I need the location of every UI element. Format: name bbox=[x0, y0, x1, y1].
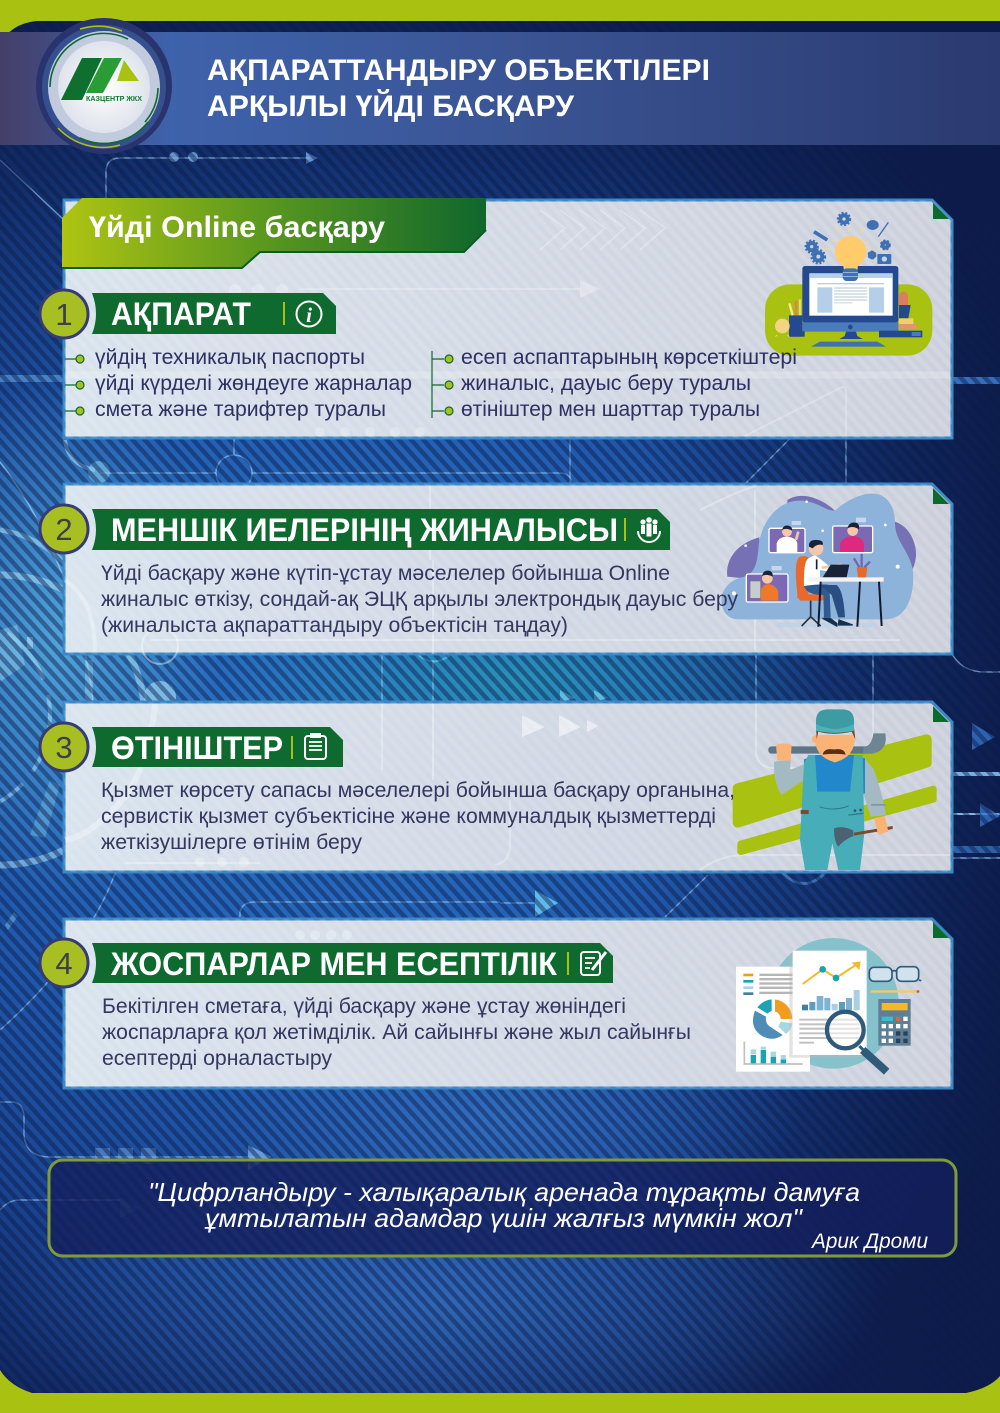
heading ribbon: ЖОСПАРЛАР МЕН ЕСЕПТІЛІК: ЖОСПАРЛАР МЕН ЕСЕПТІЛІК bbox=[110, 946, 557, 982]
heading ribbon: АҚПАРАТ: АҚПАРАТ bbox=[111, 296, 251, 332]
body text: Қызмет көрсету сапасы мәселелері бойынша басқару органына, bbox=[101, 779, 735, 802]
number badge 1 bbox=[40, 290, 88, 338]
body text: жеткізушілерге өтінім беру bbox=[101, 831, 362, 854]
quote box bbox=[49, 1160, 956, 1256]
title: АҚПАРАТТАНДЫРУ ОБЪЕКТІЛЕРІ bbox=[207, 54, 710, 87]
bullet list right: өтініштер мен шарттар туралы bbox=[461, 398, 760, 421]
illustration: plumber with wrench bbox=[738, 709, 933, 870]
bullet list right: есеп аспаптарының көрсеткіштері bbox=[461, 346, 797, 369]
body text: сервистік қызмет субъектісіне және коммуналдық қызметтерді bbox=[101, 805, 716, 828]
panel: 2 МЕНШІК ИЕЛЕРІНІҢ ЖИНАЛЫСЫ bbox=[40, 484, 952, 664]
number badge 1: 1 bbox=[55, 297, 73, 332]
body text: жиналыс өткізу, сондай-ақ ЭЦҚ арқылы электрондық дауыс беру bbox=[101, 588, 739, 611]
number badge 4 bbox=[40, 939, 88, 987]
bullet list left: үйді күрделі жөндеуге жарналар bbox=[95, 372, 412, 395]
illustration: computer with light bulb bbox=[765, 213, 932, 356]
body text bbox=[101, 779, 735, 854]
bullet list left: смета және тарифтер туралы bbox=[95, 398, 386, 421]
logo: КАЗЦЕНТР ЖКХ bbox=[86, 94, 142, 103]
number badge 4: 4 bbox=[55, 946, 73, 981]
heading ribbon: АҚПАРАТ: i bbox=[306, 303, 312, 327]
number badge 2 bbox=[40, 505, 88, 553]
panel: 1 АҚПАРАТ bbox=[40, 198, 952, 438]
section tab: Үйді Online басқару bbox=[62, 198, 486, 268]
heading ribbon: АҚПАРАТ bbox=[92, 293, 336, 334]
bullet list left: үйдің техникалық паспорты bbox=[95, 346, 365, 369]
title: АРҚЫЛЫ ҮЙДІ БАСҚАРУ bbox=[207, 89, 574, 123]
logo bbox=[36, 18, 172, 154]
body text: есептерді орналастыру bbox=[102, 1047, 333, 1070]
panel: 4 ЖОСПАРЛАР МЕН ЕСЕПТІЛІК bbox=[40, 919, 952, 1088]
body text: Бекітілген сметаға, үйді басқару және ұстау жөніндегі bbox=[102, 995, 626, 1018]
title bbox=[207, 54, 710, 123]
body text: (жиналыста ақпараттандыру объектісін таңдау) bbox=[101, 614, 568, 637]
heading ribbon: ӨТІНІШТЕР bbox=[92, 727, 343, 767]
bullet list right: жиналыс, дауыс беру туралы bbox=[461, 372, 751, 395]
header band bbox=[0, 32, 1000, 145]
quote text: ұмтылатын адамдар үшін жалғыз мүмкін жол" bbox=[204, 1203, 804, 1233]
number badge 3: 3 bbox=[55, 730, 73, 765]
illustration: reports and magnifier bbox=[736, 938, 921, 1072]
section tab: Үйді Online басқару: Үйді Online басқару bbox=[89, 211, 385, 244]
illustration: online meeting bbox=[721, 494, 916, 627]
number badge 3 bbox=[40, 723, 88, 771]
body text: Үйді басқару және күтіп-ұстау мәселелер бойынша Online bbox=[101, 562, 670, 585]
panel: 3 ӨТІНІШТЕР bbox=[40, 702, 952, 872]
number badge 2: 2 bbox=[55, 512, 73, 547]
body text: жоспарларға қол жетімділік. Ай сайынғы және жыл сайынғы bbox=[102, 1021, 691, 1044]
bullet list left bbox=[65, 346, 412, 421]
heading ribbon: ӨТІНІШТЕР: ӨТІНІШТЕР bbox=[111, 730, 283, 766]
body text bbox=[101, 562, 739, 637]
heading ribbon: МЕНШІК ИЕЛЕРІНІҢ ЖИНАЛЫСЫ: МЕНШІК ИЕЛЕРІНІҢ ЖИНАЛЫСЫ bbox=[111, 512, 618, 548]
body text bbox=[102, 995, 691, 1070]
bullet list right bbox=[432, 346, 797, 421]
quote text bbox=[148, 1177, 860, 1233]
quote author: Арик Дроми bbox=[810, 1230, 928, 1253]
quote text: "Цифрландыру - халықаралық аренада тұрақты дамуға bbox=[148, 1177, 860, 1207]
